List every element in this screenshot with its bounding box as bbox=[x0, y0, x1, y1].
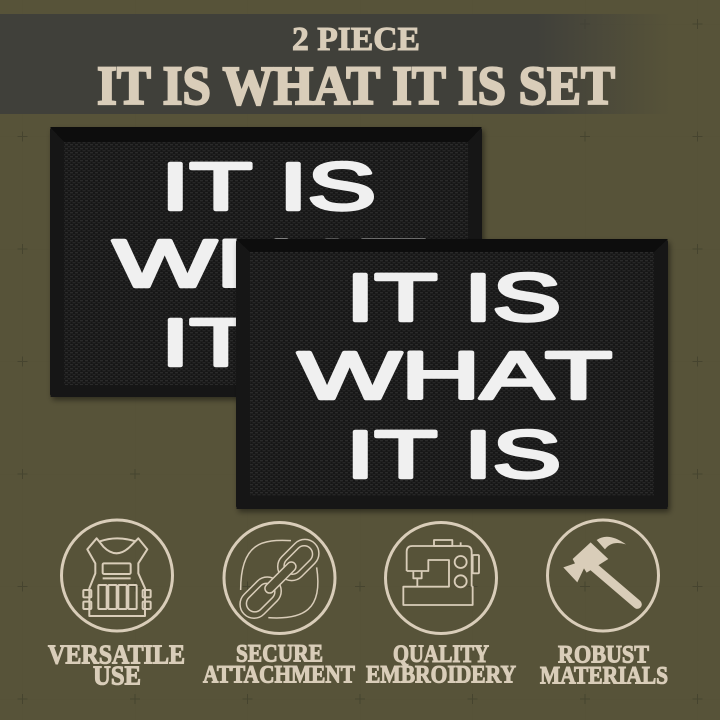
front patch text: WHAT bbox=[298, 338, 612, 414]
front patch text bbox=[298, 260, 612, 492]
back patch text bbox=[113, 150, 427, 380]
back patch text: IT IS bbox=[161, 306, 376, 380]
label: robust materials: ROBUST bbox=[558, 640, 649, 668]
label: secure attachment bbox=[203, 638, 355, 688]
label: quality embroidery: QUALITY bbox=[393, 639, 489, 668]
icon: chain link bbox=[224, 522, 335, 634]
patch: front bbox=[236, 239, 668, 509]
label: secure attachment: ATTACHMENT bbox=[203, 660, 355, 688]
feature: versatile use bbox=[48, 520, 185, 690]
front patch text: IT IS bbox=[346, 260, 561, 336]
front patch text: IT IS bbox=[346, 418, 561, 492]
label: secure attachment: SECURE bbox=[236, 638, 323, 668]
feature: robust materials bbox=[540, 520, 668, 690]
header banner bbox=[0, 14, 670, 114]
subtitle: 2 PIECE bbox=[292, 21, 420, 58]
label: versatile use: USE bbox=[93, 660, 141, 690]
back patch text: WHAT bbox=[113, 226, 427, 302]
back patch text: IT IS bbox=[161, 150, 376, 224]
icon: tactical vest bbox=[62, 520, 172, 631]
patch: back bbox=[50, 127, 482, 397]
feature: secure attachment bbox=[203, 522, 355, 688]
label: versatile use bbox=[48, 640, 185, 690]
label: robust materials bbox=[540, 640, 668, 690]
title: IT IS WHAT IT IS SET bbox=[97, 55, 615, 116]
icon: hammer bbox=[548, 520, 658, 631]
feature: quality embroidery bbox=[366, 522, 516, 688]
label: quality embroidery bbox=[366, 639, 516, 688]
label: quality embroidery: EMBROIDERY bbox=[366, 660, 516, 688]
icon: sewing machine bbox=[386, 522, 496, 634]
label: versatile use: VERSATILE bbox=[48, 640, 185, 670]
label: robust materials: MATERIALS bbox=[540, 660, 668, 690]
